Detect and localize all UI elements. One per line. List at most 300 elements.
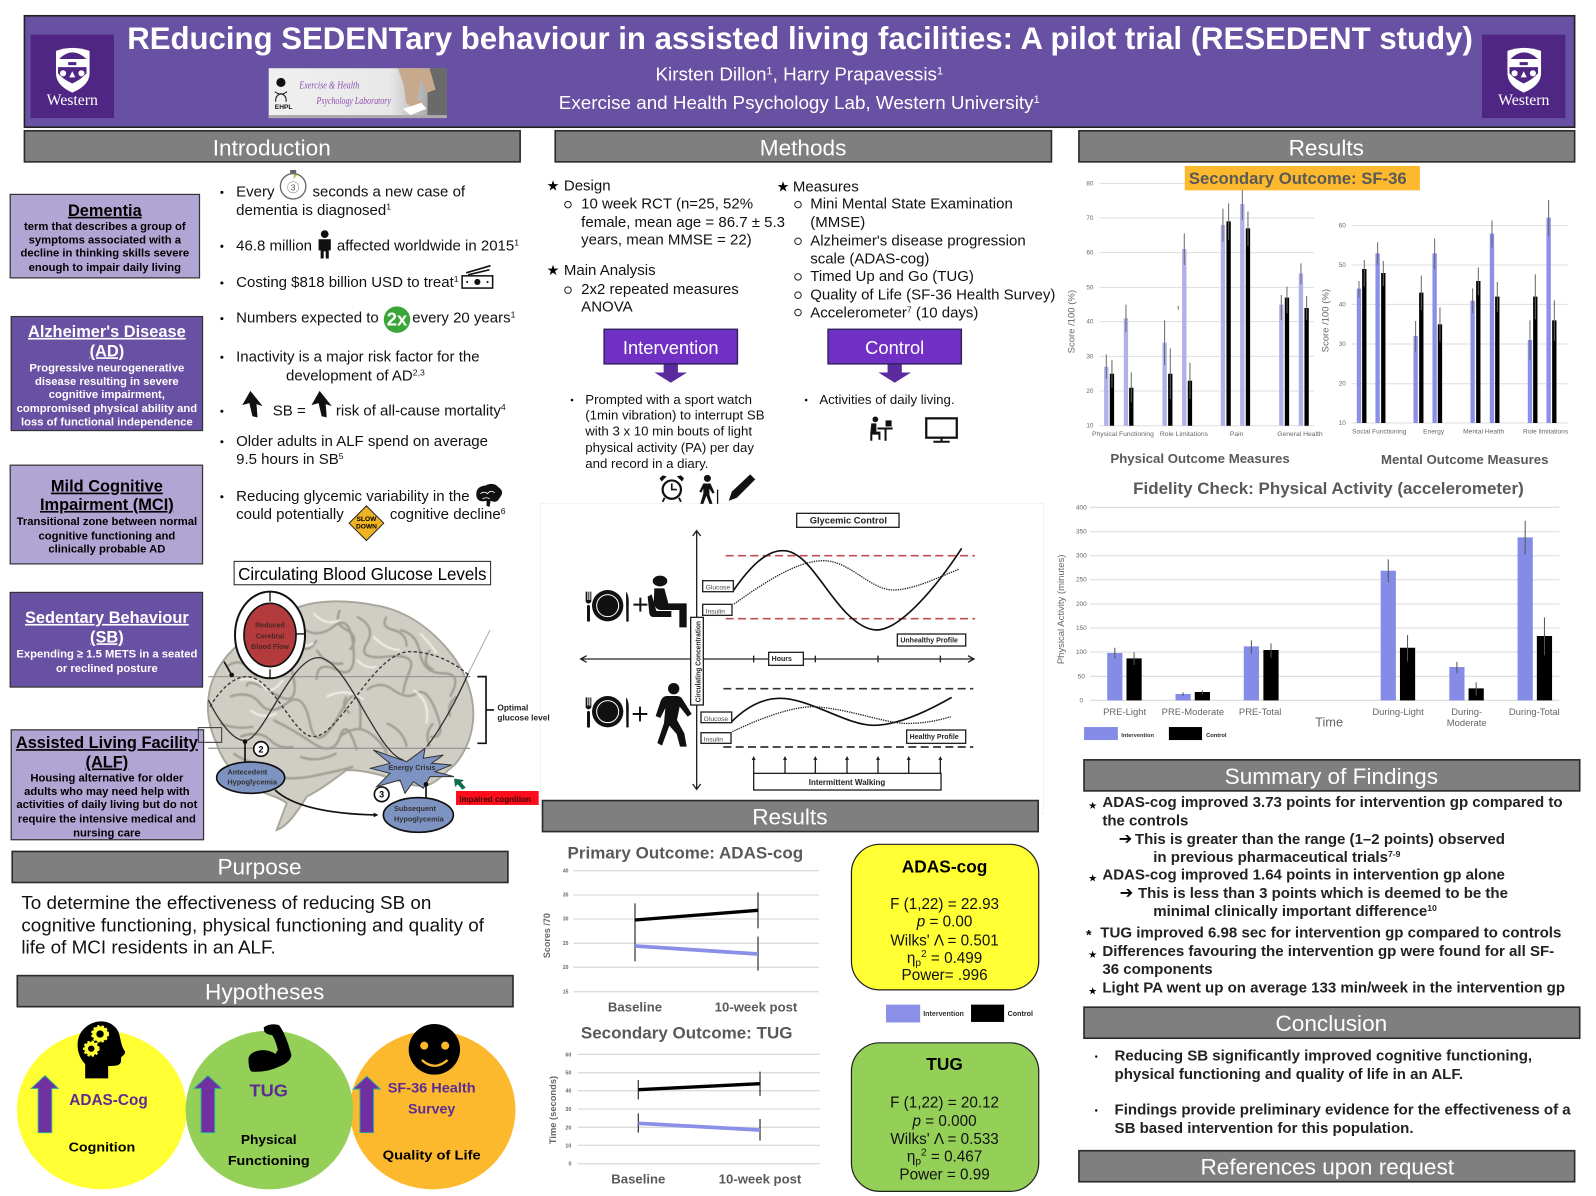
chart: fidelity check physical activity — [1056, 479, 1560, 740]
text block: summary of findings: 7-9 — [1388, 849, 1401, 859]
chart: fidelity check physical activity: 350 — [1076, 529, 1087, 536]
chart: fidelity check physical activity: Fidelity Check: Physical Activity (accelerometer) — [1133, 479, 1524, 498]
text block: purpose: cognitive functioning, physical functioning and quality of — [21, 914, 485, 935]
chart: primary outcome ADAS-cog: Baseline — [608, 1000, 662, 1015]
heading: Methods — [555, 131, 1051, 162]
stats box: ADAS-cog: Power= .996 — [902, 967, 988, 984]
icon: meal plus walking — [586, 683, 692, 747]
panel: definition Dementia: symptoms associated with a — [29, 234, 182, 246]
label: impaired cognition — [456, 791, 539, 805]
text block: control description: Activities of daily living. — [819, 392, 955, 407]
heading: References upon request — [1079, 1151, 1575, 1182]
chart: primary outcome ADAS-cog: 25 — [563, 941, 569, 947]
circle: ADAS-Cog cognition: Cognition — [69, 1140, 135, 1155]
circle: reduced cerebral blood flow: Cerebral — [256, 633, 284, 640]
chart: SF-36 mental outcomes: Social Functioning — [1352, 428, 1407, 435]
text: SF-36 quality of life: Survey — [408, 1100, 455, 1116]
heading: Conclusion: Conclusion — [1276, 1011, 1387, 1036]
icon: pencil — [729, 474, 755, 501]
panel: methods measures: scale (ADAS-cog) — [810, 251, 929, 268]
lab logo — [269, 68, 447, 118]
panel: definition Alzheimer's Disease: cognitive impairment, — [49, 389, 165, 401]
icon: 2x badge: 2x — [387, 309, 408, 330]
panel: methods measures: Accelerometer — [810, 305, 907, 322]
bracket: optimal glucose level — [477, 677, 550, 743]
chart: SF-36 physical outcomes: 20 — [1086, 388, 1094, 395]
stats box: ADAS-cog: = 0.499 — [927, 950, 982, 967]
icon: Western logo left: Western — [47, 92, 98, 109]
text block: conclusion: physical functioning and quality of life in an ALF. — [1115, 1066, 1463, 1083]
chart: secondary outcome TUG: 40 — [565, 1089, 571, 1095]
panel: methods design and analysis: 10 week RCT (n=25, 52% — [581, 196, 753, 213]
circle: TUG physical functioning: Functioning — [228, 1153, 310, 1168]
text block: purpose: To determine the effectiveness of reducing SB on — [21, 892, 431, 913]
lab logo: Psychology Laboratory — [316, 95, 391, 107]
icon: alarm clock — [660, 475, 684, 502]
chart: fidelity check physical activity: PRE-Light — [1103, 706, 1147, 717]
panel: definition Assisted Living Facility — [11, 730, 204, 840]
circle: ADAS-Cog cognition: ADAS-Cog — [69, 1092, 148, 1109]
panel: methods measures: Mini Mental State Examination — [810, 196, 1013, 213]
icon: head with gears — [78, 1021, 125, 1078]
horizontal axis — [581, 656, 974, 662]
chart: SF-36 physical outcomes: 50 — [1086, 284, 1094, 291]
chart: secondary outcome TUG: 10-week post — [719, 1171, 802, 1186]
unhealthy profile curves — [726, 548, 975, 630]
label: glucose top — [703, 581, 733, 592]
panel: definition Alzheimer's Disease — [11, 317, 203, 431]
panel: definition Dementia: term that describes a group of — [24, 221, 186, 233]
affiliation: Exercise and Health Psychology Lab, Western University — [559, 92, 1034, 113]
panel: definition Alzheimer's Disease: compromised physical ability and — [17, 403, 197, 415]
icon: stopwatch: 3 — [291, 183, 296, 192]
panel: methods design and analysis: ★ — [547, 263, 559, 279]
chart: SF-36 physical outcomes: Score /100 (%) — [1067, 290, 1078, 353]
label: secondary outcome SF-36: Secondary Outcome: SF-36 — [1189, 169, 1407, 188]
icon: Western logo right — [1482, 35, 1565, 118]
text block: introduction bullets: could potentially — [236, 506, 344, 523]
text block: summary of findings: This is less than 3 points which is deemed to be the — [1138, 885, 1508, 902]
circle: ADAS-Cog cognition — [17, 1031, 187, 1189]
chart: SF-36 mental outcomes: 20 — [1339, 381, 1346, 388]
circle: reduced cerebral blood flow: Blood Flow — [251, 644, 289, 651]
stats box: TUG: Power = 0.99 — [899, 1167, 990, 1184]
intermittent walking: Intermittent Walking — [809, 778, 885, 787]
marker 3: 3 — [379, 790, 384, 800]
authors: 1 — [766, 65, 773, 77]
chart: SF-36 mental outcomes: Score /100 (%) — [1321, 289, 1332, 352]
icon: meal plus sitting — [586, 576, 687, 627]
chart: SF-36 mental outcomes: 10 — [1339, 420, 1346, 427]
chart: SF-36 physical outcomes: Role Limitations — [1160, 431, 1209, 438]
text block: intervention description: and record in a diary. — [585, 456, 708, 471]
heading: Introduction — [24, 131, 520, 162]
panel: definition Mild Cognitive Impairment: Impairment (MCI) — [40, 496, 174, 514]
diagram: circulating blood glucose brain — [198, 561, 550, 832]
icon: slow down sign: SLOW — [357, 516, 377, 523]
panel: definition Mild Cognitive Impairment: Mild Cognitive — [51, 478, 163, 496]
stats box: TUG: F (1,22) = 20.12 — [890, 1094, 999, 1111]
text block: introduction bullets: 1 — [511, 310, 516, 320]
legend: intervention and control: Control — [1206, 733, 1227, 739]
stats box: ADAS-cog — [851, 844, 1039, 990]
text block: summary of findings: 10 — [1427, 903, 1437, 913]
panel: methods measures: ★ — [777, 179, 789, 195]
text block: summary of findings: Differences favouring the intervention gp were found for all SF- — [1102, 943, 1554, 960]
label: glycemic control — [797, 513, 899, 527]
label: impaired cognition: Impaired cognition — [459, 795, 531, 804]
text block: introduction bullets: every 20 years — [412, 310, 511, 327]
text block: summary of findings: ★ — [1088, 873, 1097, 884]
box: control — [828, 329, 961, 383]
panel: definition Assisted Living Facility: require the intensive medical and — [18, 813, 196, 825]
panel: definition Dementia — [10, 194, 199, 278]
text block: introduction bullets: Costing $818 billion USD to treat — [236, 274, 454, 291]
panel: definition Sedentary Behaviour: (SB) — [90, 628, 124, 646]
authors: 1 — [937, 65, 943, 77]
text block: introduction bullets: 1 — [386, 202, 391, 212]
text block: summary of findings: Light PA went up on average 133 min/week in the intervention gp — [1102, 979, 1565, 996]
legend: intervention and control — [886, 1005, 1033, 1022]
icon: 2x badge — [384, 306, 410, 333]
text block: introduction bullets: 9.5 hours in SB — [236, 451, 339, 468]
chart: primary outcome ADAS-cog: 35 — [563, 893, 569, 899]
text block: introduction bullets: risk of all-cause mortality — [336, 402, 501, 419]
icon: stopwatch — [280, 170, 306, 199]
stats box: TUG: η — [907, 1148, 915, 1165]
panel: definition Assisted Living Facility: nursing care — [73, 828, 141, 840]
text block: summary of findings: 36 components — [1102, 961, 1213, 978]
label: insulin bottom: Insulin — [704, 737, 723, 744]
label: glycemic control: Glycemic Control — [810, 516, 887, 526]
circle: TUG physical functioning: Physical — [241, 1132, 297, 1147]
text block: summary of findings: * — [1086, 927, 1092, 943]
oval: subsequent hypoglycemia — [383, 798, 453, 832]
chart: SF-36 mental outcomes — [1321, 200, 1569, 435]
text block: summary of findings: ➔ — [1120, 883, 1133, 902]
bracket: optimal glucose level: glucose level — [497, 713, 550, 723]
panel: methods design and analysis: 2x2 repeated measures — [581, 281, 739, 298]
icon: slow down sign — [349, 506, 384, 540]
chart: primary outcome ADAS-cog: 10-week post — [715, 1000, 798, 1015]
chart: SF-36 physical outcomes: General Health — [1277, 431, 1323, 438]
oval: antecedent hypoglycemia — [217, 762, 285, 793]
panel: definition Mild Cognitive Impairment: cognitive functioning and — [39, 530, 175, 542]
label: healthy profile: Healthy Profile — [910, 734, 959, 741]
text block: summary of findings: ★ — [1088, 801, 1097, 812]
chart: secondary outcome TUG: Baseline — [611, 1171, 665, 1186]
stats box: ADAS-cog: p = 0.00 — [916, 913, 972, 930]
heading: Results right — [1079, 131, 1575, 162]
text block: summary of findings: ➔ — [1119, 829, 1132, 848]
diagram: glycemic control — [540, 504, 1044, 814]
chart: primary outcome ADAS-cog — [542, 843, 819, 1015]
text block: introduction bullets: 46.8 million — [236, 237, 312, 254]
heading: Summary of Findings: Summary of Findings — [1225, 764, 1438, 789]
heading: Circulating Blood Glucose Levels: Circulating Blood Glucose Levels — [238, 564, 487, 584]
text block: introduction bullets: 5 — [339, 451, 344, 461]
marker 2 — [254, 742, 268, 756]
chart: secondary outcome TUG: 30 — [565, 1107, 571, 1113]
affiliation: 1 — [1034, 94, 1040, 106]
chart: secondary outcome TUG: 0 — [569, 1162, 572, 1168]
text block: introduction bullets: cognitive decline — [390, 506, 501, 523]
label: circulating concentration — [691, 617, 703, 705]
heading: Results centre: Results — [752, 804, 828, 829]
label: unhealthy profile: Unhealthy Profile — [900, 637, 958, 644]
panel: methods measures: (10 days) — [912, 305, 978, 322]
chart: fidelity check physical activity: During-Light — [1372, 706, 1424, 717]
chart: SF-36 mental outcomes: 40 — [1339, 301, 1346, 308]
circle: reduced cerebral blood flow: Reduced — [255, 622, 285, 629]
lab logo: Exercise & Health — [298, 80, 359, 92]
panel: definition Alzheimer's Disease: disease resulting in severe — [35, 376, 179, 388]
panel: definition Dementia: decline in thinking skills severe — [21, 248, 189, 260]
chart: SF-36 mental outcomes: 30 — [1339, 341, 1346, 348]
chart: secondary outcome TUG: Secondary Outcome: TUG — [581, 1023, 792, 1042]
chart: fidelity check physical activity: 100 — [1076, 649, 1087, 656]
text block: intervention description — [571, 392, 765, 471]
chart: primary outcome ADAS-cog: 20 — [563, 965, 569, 971]
vertical axis — [693, 531, 701, 789]
stats box: ADAS-cog: 2 — [921, 949, 927, 960]
icon: brain small — [476, 484, 502, 507]
chart: SF-36 physical outcomes: Physical Functioning — [1092, 431, 1154, 438]
chart: SF-36 physical outcomes: 30 — [1086, 353, 1094, 360]
label: healthy profile — [907, 730, 966, 743]
chart: SF-36 physical outcomes — [1067, 180, 1323, 438]
chart: SF-36 physical outcomes: 40 — [1086, 319, 1094, 326]
chart: secondary outcome TUG: Time (seconds) — [548, 1076, 558, 1144]
icon: person — [319, 230, 331, 259]
text block: summary of findings: minimal clinically important difference — [1153, 903, 1427, 920]
heading: Hypotheses: Hypotheses — [205, 980, 324, 1005]
heading: Summary of Findings — [1084, 760, 1580, 791]
circle: TUG physical functioning: TUG — [249, 1081, 288, 1101]
panel: hypotheses circles — [17, 1021, 515, 1189]
healthy profile curves — [723, 689, 973, 747]
heading: Results right: Results — [1289, 136, 1364, 161]
authors: Kirsten Dillon — [656, 63, 766, 84]
chart: fidelity check physical activity: During-Total — [1509, 706, 1560, 717]
marker 3 — [374, 787, 389, 802]
icon: Western logo left — [31, 35, 114, 118]
label: hours: Hours — [772, 656, 792, 663]
text block: introduction bullets: dementia is diagnosed — [236, 202, 386, 219]
text block: purpose — [21, 892, 485, 958]
starburst: energy crisis: Energy Crisis — [388, 763, 436, 772]
chart: primary outcome ADAS-cog: Primary Outcome: ADAS-cog — [568, 843, 803, 862]
text block: summary of findings — [1086, 794, 1565, 997]
panel: methods measures: 7 — [907, 304, 912, 314]
panel: definition Alzheimer's Disease: Progressive neurogenerative — [29, 363, 184, 375]
chart: fidelity check physical activity: 400 — [1076, 504, 1087, 511]
text block: introduction bullets: Numbers expected to — [236, 310, 379, 327]
text block: introduction bullets: 2,3 — [413, 368, 425, 378]
panel: definition Sedentary Behaviour — [10, 592, 203, 687]
text block: summary of findings: the controls — [1102, 812, 1188, 829]
panel: methods design and analysis: years, mean MMSE = 22) — [581, 231, 752, 248]
text block: conclusion: Reducing SB significantly improved cognitive functioning, — [1115, 1048, 1532, 1065]
lab logo: EHPL — [275, 104, 292, 111]
panel: definition Assisted Living Facility: activities of daily living but do not — [16, 799, 198, 811]
text block: introduction bullets: Reducing glycemic variability in the — [236, 488, 470, 505]
chart: fidelity check physical activity: 0 — [1080, 697, 1084, 704]
icon: flexed arm — [248, 1024, 291, 1072]
text block: intervention description: (1min vibration) to interrupt SB — [585, 407, 765, 422]
icon: up arrow mortality — [311, 391, 332, 417]
chart: fidelity check physical activity: 200 — [1076, 601, 1087, 608]
chart: fidelity check physical activity: PRE-Moderate — [1162, 706, 1224, 717]
text: SF-36 quality of life — [353, 1076, 481, 1162]
chart: SF-36 mental outcomes: Mental Health — [1463, 428, 1504, 435]
text block: summary of findings: This is greater than the range (1–2 points) observed — [1135, 831, 1505, 848]
text block: introduction bullets — [220, 170, 519, 540]
stats box: TUG: p — [915, 1156, 921, 1167]
text block: summary of findings: ★ — [1088, 950, 1097, 961]
text block: introduction bullets: development of AD — [286, 368, 413, 385]
text block: intervention description: Prompted with a sport watch — [585, 392, 752, 407]
stats box: ADAS-cog: η — [907, 950, 915, 967]
stats box: TUG: 2 — [921, 1147, 927, 1158]
text block: intervention description: physical activity (PA) per day — [585, 440, 754, 455]
text: SF-36 quality of life: Quality of Life — [383, 1147, 481, 1162]
chart: fidelity check physical activity: 250 — [1076, 577, 1087, 584]
oval: subsequent hypoglycemia: Subsequent — [394, 804, 437, 813]
text block: introduction bullets: 4 — [501, 402, 506, 412]
box: intervention — [604, 329, 737, 383]
text block: introduction bullets: affected worldwide in 2015 — [337, 237, 514, 254]
box: control: Control — [865, 337, 924, 358]
panel: definition Dementia: enough to impair daily living — [29, 262, 181, 274]
text block: intervention description: with 3 x 10 min bouts of light — [584, 424, 752, 439]
text block: introduction bullets: Older adults in ALF spend on average — [236, 433, 488, 450]
circle: TUG physical functioning — [186, 1031, 353, 1189]
legend: intervention and control: Intervention — [1121, 733, 1155, 739]
panel: definition Mild Cognitive Impairment: Transitional zone between normal — [17, 516, 197, 528]
label: unhealthy profile — [897, 634, 966, 646]
header banner — [24, 16, 1575, 127]
text: SF-36 quality of life: SF-36 Health — [388, 1080, 476, 1096]
box: intervention: Intervention — [623, 337, 719, 358]
heading: References upon request: References upon request — [1201, 1155, 1455, 1180]
label: glucose bottom: Glucose — [704, 716, 728, 723]
marker 2: 2 — [259, 744, 264, 754]
panel: methods measures — [777, 178, 1055, 322]
heading: Conclusion — [1084, 1007, 1580, 1038]
chart: SF-36 physical outcomes: 10 — [1086, 423, 1094, 430]
stats box: TUG: = 0.467 — [927, 1148, 982, 1165]
heading: Methods: Methods — [760, 136, 846, 161]
text block: introduction bullets: SB = — [273, 402, 306, 419]
panel: methods measures: Quality of Life (SF-36 Health Survey) — [810, 286, 1055, 303]
panel: definition Assisted Living Facility: Housing alternative for older — [30, 773, 184, 785]
caption: physical outcome measures: Physical Outcome Measures — [1110, 451, 1290, 466]
text block: summary of findings: ADAS-cog improved 1.64 points in intervention gp alone — [1102, 866, 1505, 883]
panel: definition Mild Cognitive Impairment — [10, 465, 203, 564]
text block: conclusion — [1095, 1048, 1571, 1137]
chart: SF-36 mental outcomes: 50 — [1339, 262, 1346, 269]
heading: Introduction: Introduction — [213, 136, 331, 161]
text block: introduction bullets: Inactivity is a major risk factor for the — [236, 348, 480, 365]
heading: Hypotheses — [17, 976, 513, 1007]
chart: fidelity check physical activity: 300 — [1076, 553, 1087, 560]
oval: antecedent hypoglycemia: Hypoglycemia — [227, 777, 278, 786]
panel: methods design and analysis: Main Analysis — [564, 262, 656, 279]
chart: fidelity check physical activity: Physical Activity (minutes) — [1056, 555, 1067, 664]
chart: secondary outcome TUG: 50 — [565, 1071, 571, 1077]
label: insulin top: Insulin — [706, 609, 725, 616]
panel: definition Alzheimer's Disease: Alzheimer's Disease — [28, 323, 186, 341]
chart: fidelity check physical activity: Moderate — [1447, 717, 1487, 728]
authors: , Harry Prapavessis — [773, 63, 937, 84]
stats box: TUG — [851, 1043, 1039, 1191]
chart: SF-36 mental outcomes: 60 — [1339, 223, 1346, 230]
stats box: ADAS-cog: p — [915, 958, 921, 969]
text block: introduction bullets: Every — [236, 183, 275, 200]
chart: SF-36 mental outcomes: Energy — [1423, 428, 1445, 435]
text block: summary of findings: in previous pharmaceutical trials — [1153, 849, 1388, 866]
text block: introduction bullets: 1 — [454, 274, 459, 284]
circle: reduced cerebral blood flow — [235, 592, 305, 678]
panel: methods design and analysis — [547, 177, 785, 315]
chart: SF-36 physical outcomes: 60 — [1086, 250, 1094, 257]
chart: SF-36 physical outcomes: 80 — [1086, 180, 1094, 187]
panel: methods measures: Measures — [793, 178, 859, 195]
stats box: ADAS-cog: F (1,22) = 22.93 — [890, 896, 999, 913]
chart: fidelity check physical activity: PRE-Total — [1239, 706, 1281, 717]
label: insulin bottom — [701, 733, 731, 744]
oval: subsequent hypoglycemia: Hypoglycemia — [394, 815, 445, 824]
legend: intervention and control — [1084, 727, 1227, 740]
panel: methods measures: Timed Up and Go (TUG) — [810, 268, 974, 285]
text block: conclusion: SB based intervention for this population. — [1115, 1120, 1414, 1137]
panel: methods design and analysis: female, mean age = 86.7 ± 5.3 — [581, 214, 785, 231]
chart: fidelity check physical activity: Time — [1315, 715, 1343, 730]
intermittent walking — [752, 756, 942, 790]
label: insulin top — [703, 604, 732, 616]
panel: definition Assisted Living Facility: Assisted Living Facility — [16, 734, 199, 752]
heading: Purpose — [12, 851, 508, 882]
legend: intervention and control: Intervention — [923, 1010, 964, 1018]
panel: definition Dementia: Dementia — [68, 202, 143, 220]
panel: definition Alzheimer's Disease: (AD) — [90, 342, 124, 360]
icon: person at desk — [870, 417, 893, 441]
icon: up arrow sedentary — [242, 391, 263, 417]
text block: summary of findings: ADAS-cog improved 3.73 points for intervention gp compared to — [1102, 794, 1563, 811]
panel: methods design and analysis: Design — [564, 177, 611, 194]
panel: definition Sedentary Behaviour: Expending ≥ 1.5 METS in a seated — [16, 649, 197, 661]
heading: Results centre — [543, 801, 1038, 832]
chart: secondary outcome TUG: 10 — [565, 1143, 571, 1149]
chart: SF-36 physical outcomes: Pain — [1230, 431, 1244, 438]
heading: Purpose: Purpose — [217, 854, 302, 879]
chart: secondary outcome TUG: 20 — [565, 1125, 571, 1131]
text block: conclusion: Findings provide preliminary evidence for the effectiveness of a — [1115, 1102, 1571, 1119]
label: glucose top: Glucose — [706, 585, 730, 592]
icon: money — [462, 266, 493, 288]
icon: smiley face — [409, 1024, 460, 1075]
icon: computer monitor — [926, 418, 957, 442]
panel: methods measures: (MMSE) — [810, 214, 865, 231]
chart: SF-36 mental outcomes: Role limitations — [1523, 428, 1569, 435]
chart: primary outcome ADAS-cog: 30 — [563, 917, 569, 923]
chart: primary outcome ADAS-cog: 40 — [563, 868, 569, 874]
caption: mental outcome measures: Mental Outcome Measures — [1381, 452, 1548, 467]
text block: introduction bullets: 1 — [514, 237, 519, 247]
stats box: ADAS-cog: ADAS-cog — [902, 856, 987, 876]
text block: introduction bullets: seconds a new case of — [312, 183, 466, 200]
